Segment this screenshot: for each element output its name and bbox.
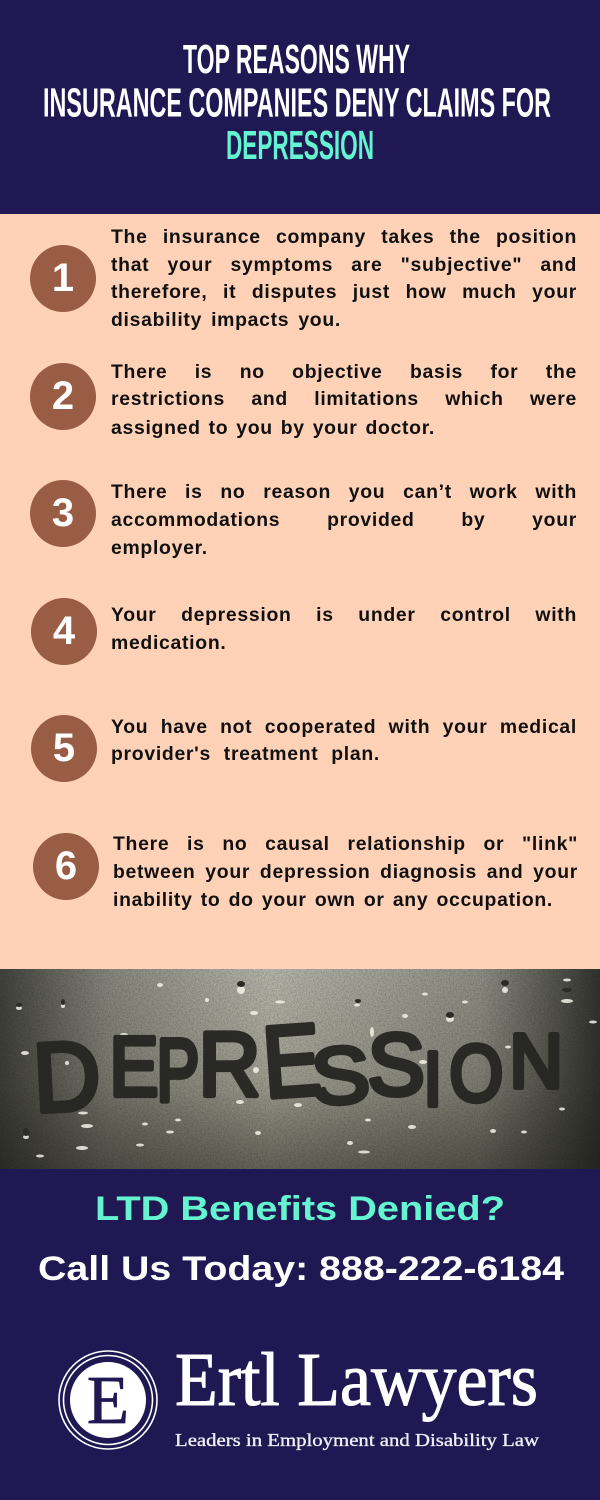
icon: number 5	[31, 715, 97, 782]
handwritten word: I	[424, 1037, 442, 1123]
text: reason 2: There is no objective basis for the	[111, 361, 577, 383]
handwritten word: O	[450, 1028, 503, 1118]
text: reason 6: between your depression diagnosis and your	[113, 861, 578, 883]
logo: Ertl Lawyers: Ertl Lawyers	[175, 1338, 538, 1422]
text: reason 4: Your depression is under control with	[111, 604, 577, 626]
heading: title: TOP REASONS WHY	[183, 36, 410, 82]
icon: Ertl E seal	[59, 1351, 157, 1449]
icon: number 6	[33, 833, 99, 900]
icon: number 6: 6	[55, 844, 77, 888]
heading: title	[43, 36, 551, 168]
text: reason 1: disability impacts you.	[111, 309, 341, 331]
panel: call to action and logo	[0, 1169, 600, 1500]
text: reason 3: employer.	[111, 537, 208, 559]
text: reason 2: assigned to you by your doctor.	[111, 417, 435, 439]
handwritten word: R	[198, 1013, 261, 1115]
text: reason 3: There is no reason you can’t work with	[111, 481, 577, 503]
text: reason 2	[111, 361, 577, 439]
icon: Ertl E seal: E	[87, 1362, 129, 1438]
text: reason 1: therefore, it disputes just how much your	[111, 281, 577, 303]
icon: number 3	[30, 480, 96, 547]
handwritten word: S	[309, 1029, 372, 1122]
reason 3	[30, 480, 577, 559]
heading: title: DEPRESSION	[226, 122, 374, 168]
icon: number 5: 5	[53, 726, 75, 770]
text: reason 1: that your symptoms are "subjective" and	[111, 254, 577, 276]
reason 4	[31, 598, 577, 665]
handwritten word: N	[510, 1019, 563, 1105]
callout: LTD benefits denied: LTD Benefits Denied?	[95, 1190, 505, 1228]
handwritten word: S	[368, 1017, 425, 1114]
text: reason 4: medication.	[111, 632, 226, 654]
icon: number 3: 3	[52, 491, 74, 535]
handwritten word: E	[259, 1002, 324, 1119]
reason 6	[33, 833, 578, 911]
reason 1	[30, 226, 577, 331]
text: reason 6: inability to do your own or any occupation.	[113, 889, 553, 911]
icon: number 1: 1	[52, 256, 74, 300]
text: reason 5: You have not cooperated with your medical	[111, 716, 577, 738]
handwritten word: P	[156, 1022, 199, 1120]
handwritten word: D	[30, 1021, 103, 1134]
text: reason 1	[111, 226, 577, 331]
panel: title header	[0, 0, 600, 214]
panel: reasons list	[0, 214, 600, 970]
icon: number 2: 2	[52, 374, 74, 418]
text: reason 4	[111, 604, 577, 654]
text: reason 6: There is no causal relationship or "link"	[113, 833, 578, 855]
droplets	[16, 978, 597, 1158]
text: reason 3: accommodations provided by your	[111, 509, 577, 531]
text: reason 3	[111, 481, 577, 559]
text: reason 2: restrictions and limitations which were	[111, 388, 577, 410]
icon: number 1	[30, 245, 96, 312]
icon: number 4	[31, 598, 97, 665]
handwritten word: E	[110, 1020, 158, 1114]
reason 2	[30, 361, 577, 439]
text: reason 5: provider's treatment plan.	[111, 743, 380, 765]
reason 5	[31, 715, 577, 782]
text: reason 6	[113, 833, 578, 911]
tagline: Leaders in Employment and Disability Law	[175, 1430, 539, 1450]
icon: number 4: 4	[53, 609, 75, 653]
photo: depression written on a wet window	[0, 969, 600, 1169]
callout: phone number: Call Us Today: 888-222-6184	[38, 1250, 564, 1288]
text: reason 1: The insurance company takes the position	[111, 226, 577, 248]
icon: number 2	[30, 363, 96, 430]
handwritten word	[30, 1002, 563, 1134]
text: reason 5	[111, 716, 577, 765]
